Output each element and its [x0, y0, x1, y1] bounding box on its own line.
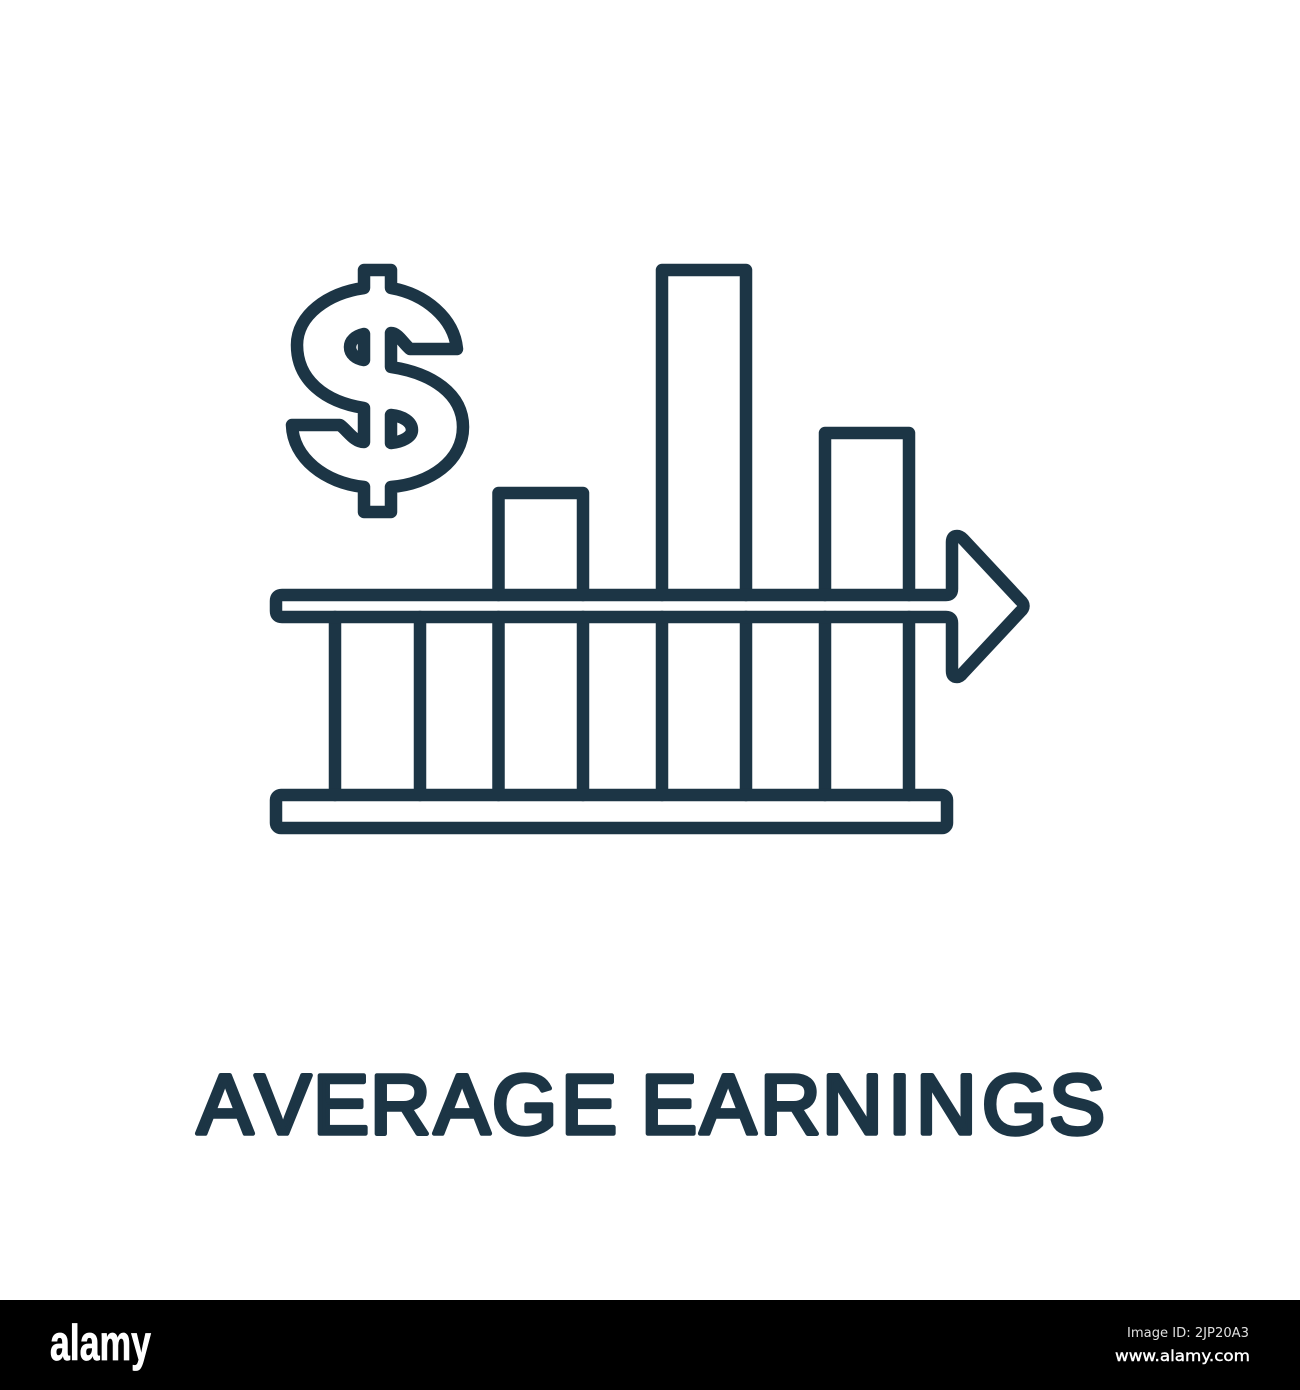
columns below the average line	[335, 617, 909, 795]
icon: dollar sign	[292, 270, 463, 512]
footer logo: alamy	[50, 1315, 151, 1371]
image id: Image ID: 2JP20A3	[1127, 1326, 1249, 1341]
chart baseline bar	[276, 795, 947, 828]
bar 3 (medium)	[825, 433, 909, 595]
bar 2 (tallest)	[662, 270, 746, 595]
title: AVERAGE EARNINGS	[197, 1058, 1105, 1152]
website: www.alamy.com	[1115, 1347, 1250, 1365]
footer bar	[0, 1300, 1300, 1390]
icon: average earnings chart	[276, 270, 1024, 828]
arrow: average line	[276, 536, 1024, 677]
bar 1 (short)	[498, 493, 583, 595]
